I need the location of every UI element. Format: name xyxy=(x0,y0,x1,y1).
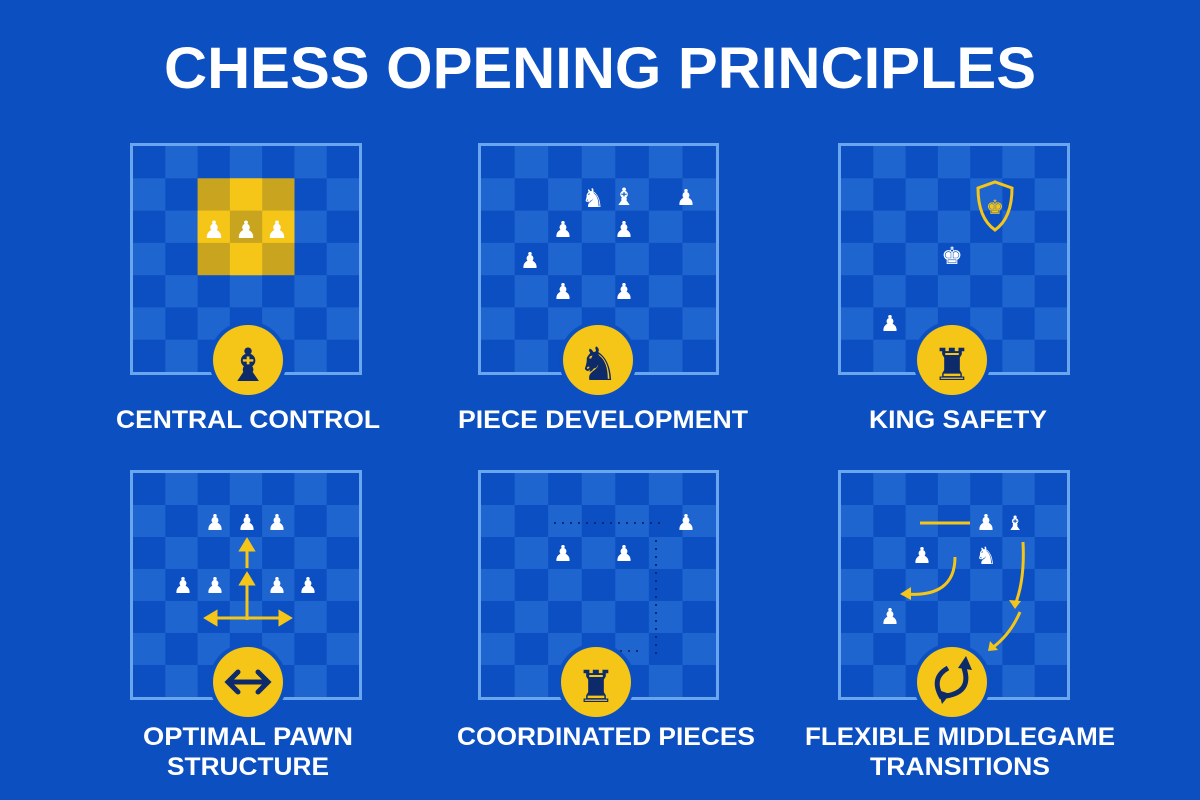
panel: optimal pawn structure: ♟ xyxy=(205,574,225,599)
icon: rook circle: ♜ xyxy=(932,340,972,391)
panel: piece development: ♟ xyxy=(553,280,573,305)
panel: optimal pawn structure: ♟ xyxy=(267,511,287,536)
label: flexible middlegame transitions: FLEXIBLE MIDDLEGAME xyxy=(805,723,1115,751)
panel: king safety: ♚ xyxy=(941,242,963,270)
label: coordinated pieces: COORDINATED PIECES xyxy=(457,723,755,751)
panel: central control: ♟ xyxy=(235,216,257,244)
icon: knight circle xyxy=(559,321,637,399)
panel: flexible middlegame transitions xyxy=(805,472,1115,781)
panel: optimal pawn structure: ♟ xyxy=(237,511,257,536)
label: king safety: KING SAFETY xyxy=(869,406,1047,434)
icon: rook circle: ♜ xyxy=(576,662,616,713)
panel: coordinated pieces: ♟ xyxy=(676,511,696,536)
icon: knight circle: ♞ xyxy=(577,337,619,391)
panel: flexible middlegame transitions: ♟ xyxy=(880,605,900,630)
panel: flexible middlegame transitions: ♟ xyxy=(912,544,932,569)
panel: optimal pawn structure: ♟ xyxy=(298,574,318,599)
panel: flexible middlegame transitions: ♝ xyxy=(1006,511,1024,535)
panel: flexible middlegame transitions: TRANSITIONS xyxy=(870,753,1050,781)
panel: optimal pawn structure xyxy=(132,472,360,781)
panel: coordinated pieces xyxy=(457,472,755,751)
icon: rook circle xyxy=(557,643,635,721)
title: CHESS OPENING PRINCIPLES xyxy=(164,36,1036,101)
panel: flexible middlegame transitions: ♞ xyxy=(975,542,997,570)
panel: optimal pawn structure: ♟ xyxy=(267,574,287,599)
panel: piece development: ♞ xyxy=(581,184,605,214)
panel: piece development: ♟ xyxy=(553,218,573,243)
label: central control: CENTRAL CONTROL xyxy=(116,406,380,434)
panel: coordinated pieces: ♟ xyxy=(553,542,573,567)
panel: optimal pawn structure: ♟ xyxy=(173,574,193,599)
panel: king safety: ♟ xyxy=(880,312,900,337)
icon: pawn circle: ♝ xyxy=(227,338,269,392)
panel: piece development: ♟ xyxy=(676,186,696,211)
panel: piece development xyxy=(458,144,748,434)
panel: piece development: ♟ xyxy=(614,280,634,305)
arrows: pawn moves xyxy=(206,540,290,624)
label: optimal pawn structure: OPTIMAL PAWN xyxy=(143,723,353,751)
icon: pawn circle xyxy=(209,321,287,399)
panel: central control: ♟ xyxy=(203,216,225,244)
panel: central control: ♟ xyxy=(266,216,288,244)
panel: central control xyxy=(116,144,380,434)
panel: king safety xyxy=(840,144,1068,434)
icon: double arrow circle xyxy=(209,643,287,721)
icon: shield xyxy=(978,182,1012,230)
icon: cycle circle xyxy=(913,643,991,721)
panel: coordinated pieces: ♟ xyxy=(614,542,634,567)
label: piece development: PIECE DEVELOPMENT xyxy=(458,406,748,434)
panel: optimal pawn structure: ♟ xyxy=(205,511,225,536)
panel: piece development: ♝ xyxy=(613,183,635,211)
panel: piece development: ♟ xyxy=(614,218,634,243)
arrows: transitions xyxy=(905,542,1023,648)
icon: rook circle xyxy=(913,321,991,399)
icon: shield: ♚ xyxy=(986,195,1004,219)
panel: piece development: ♟ xyxy=(520,249,540,274)
panel: optimal pawn structure: STRUCTURE xyxy=(167,753,329,781)
panel: flexible middlegame transitions: ♟ xyxy=(976,511,996,536)
